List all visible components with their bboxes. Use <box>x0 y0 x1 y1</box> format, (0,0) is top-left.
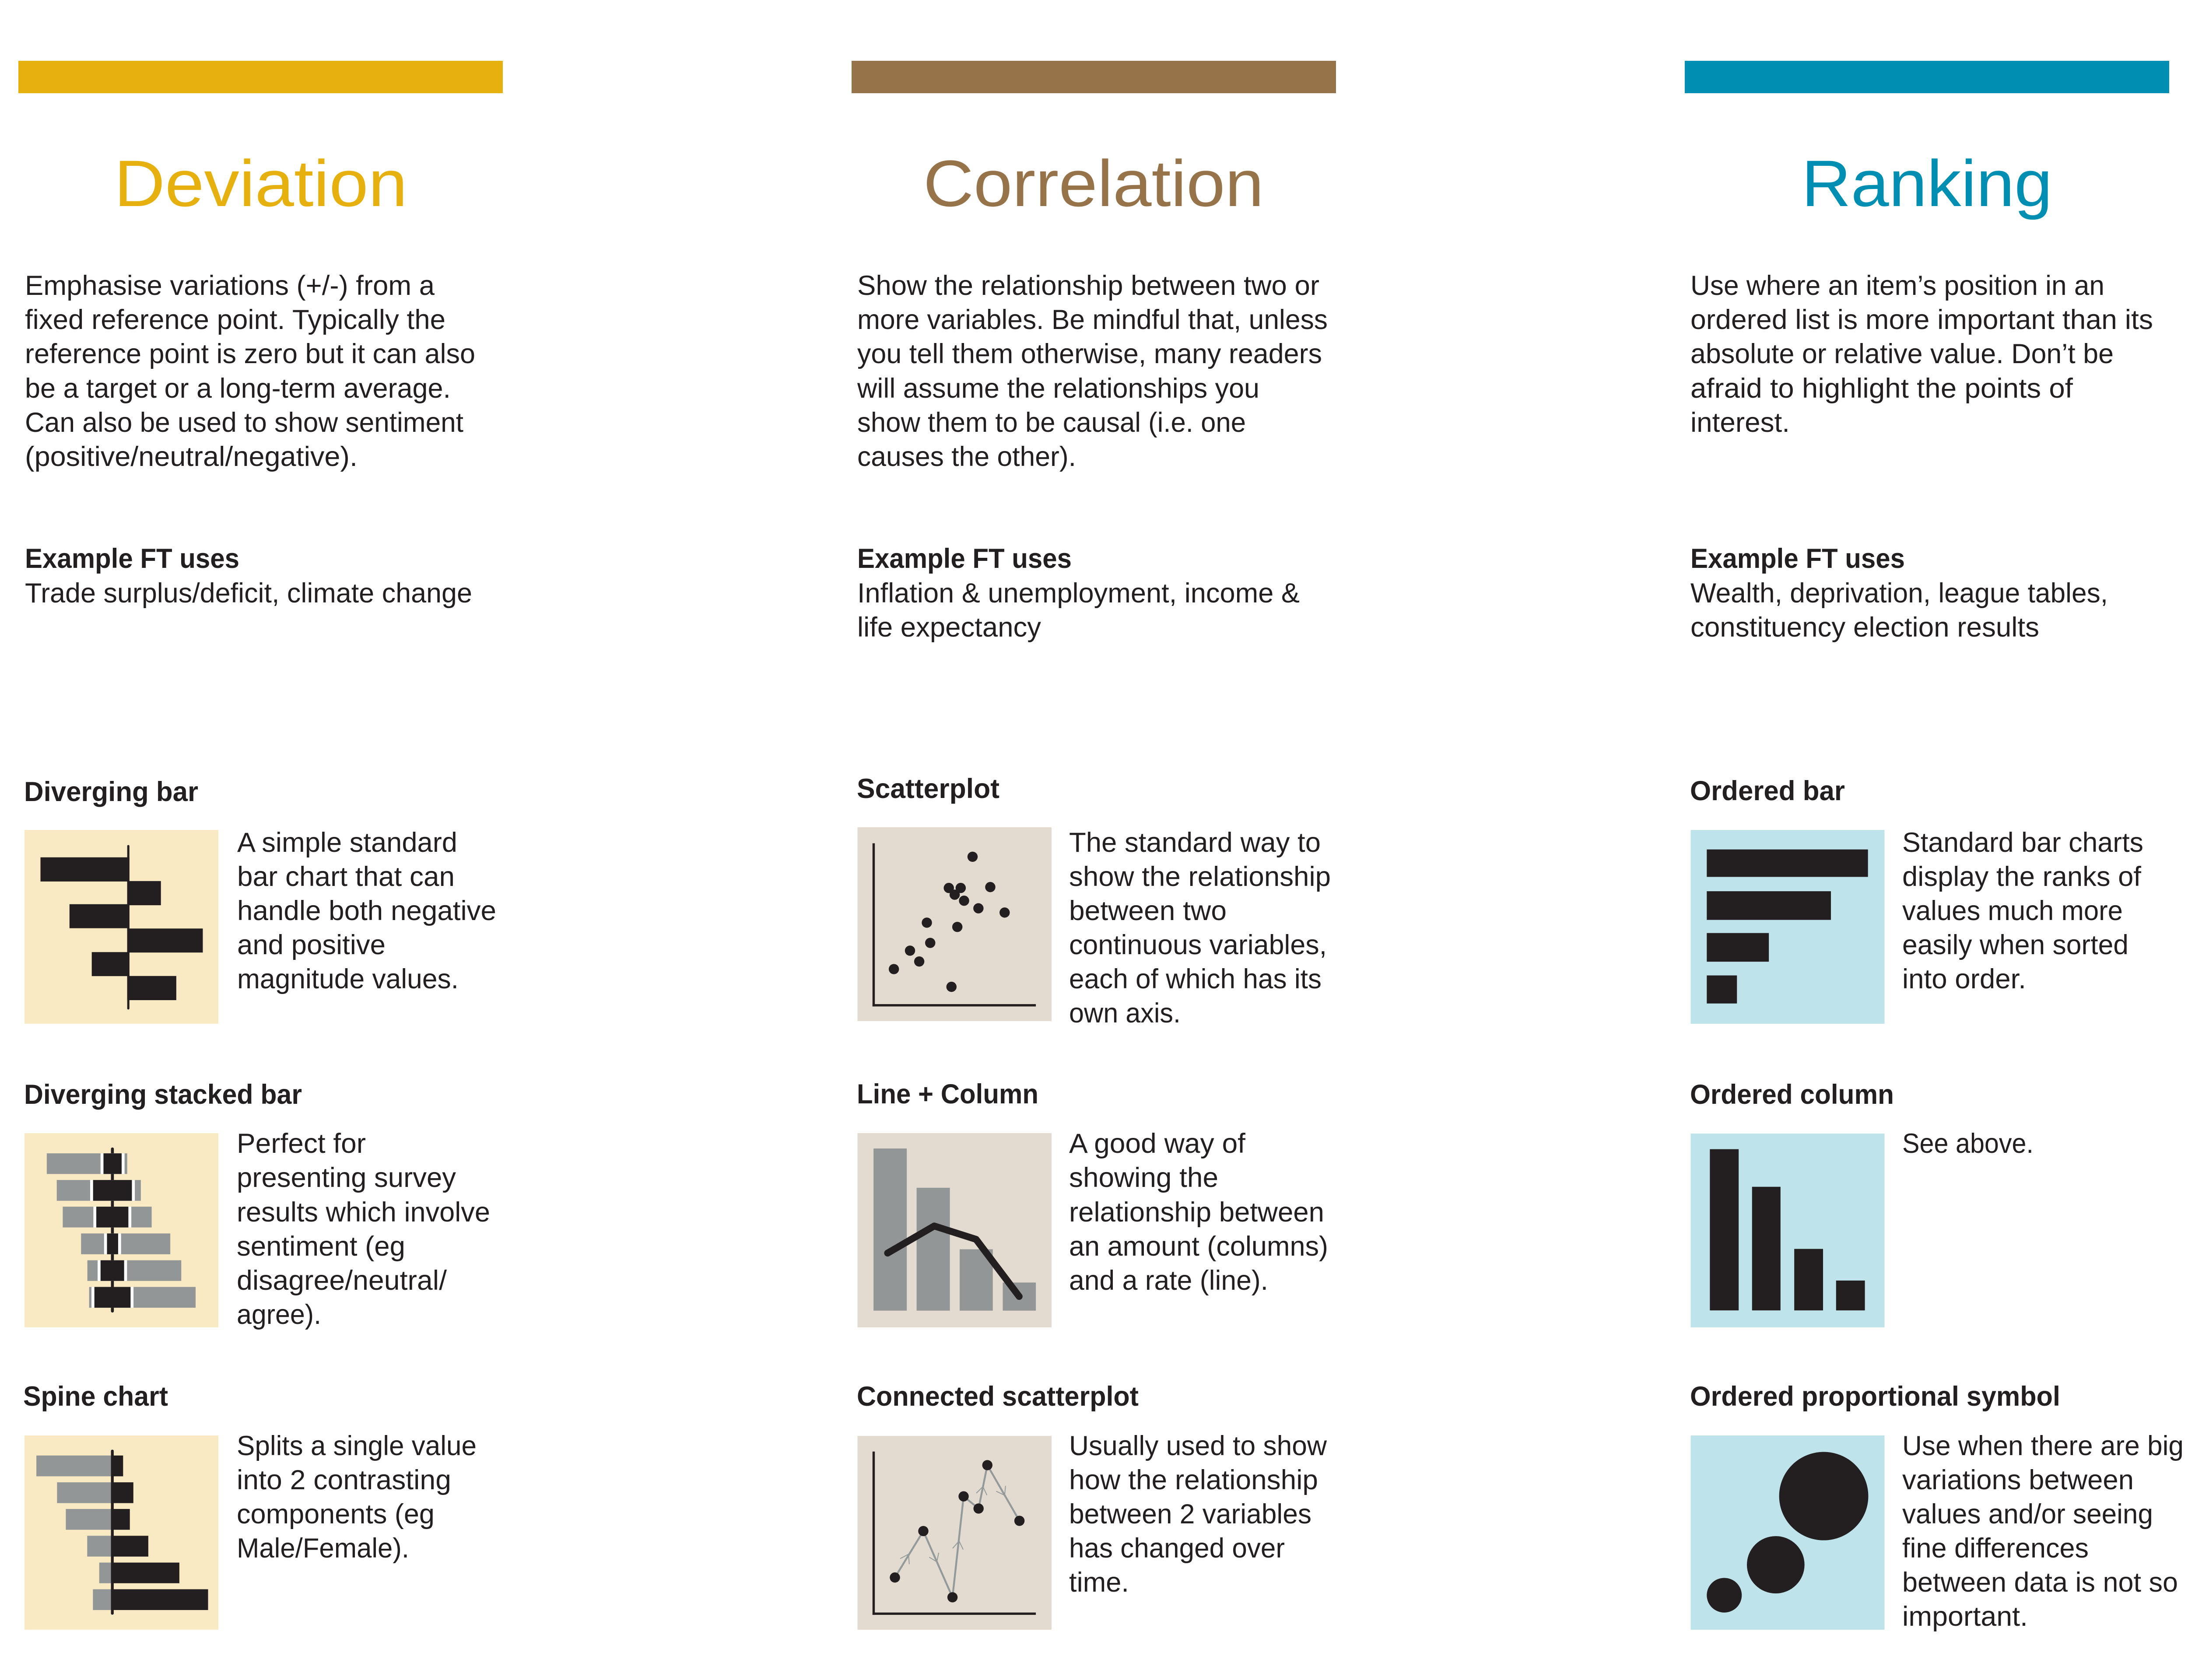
text block: scatterplot description: The standard way to <box>1069 827 1321 858</box>
text block: ordered proportional symbol description: important. <box>1902 1601 2028 1632</box>
text block: diverging stacked bar description: results which involve <box>237 1197 490 1228</box>
text block: correlation description <box>857 270 1328 472</box>
heading: Diverging stacked bar: Diverging stacked bar <box>24 1079 302 1110</box>
text block: correlation description: causes the other). <box>857 441 1076 472</box>
text block: ordered proportional symbol description: fine differences <box>1902 1533 2089 1564</box>
text block: line and column description: and a rate (line). <box>1069 1265 1268 1296</box>
colour bar: ranking <box>1685 61 2169 93</box>
text block: connected scatterplot description: has changed over <box>1069 1533 1285 1564</box>
text block: ranking description <box>1690 270 2153 438</box>
text block: ordered proportional symbol description: between data is not so <box>1902 1567 2178 1598</box>
text block: correlation example uses: life expectancy <box>857 612 1041 643</box>
text block: diverging bar description: handle both negative <box>237 896 496 926</box>
chart icon: diverging bar <box>25 830 218 1024</box>
text block: deviation description: (positive/neutral/negative). <box>25 441 358 472</box>
text block: scatterplot description <box>1069 827 1331 1029</box>
text block: spine chart description: Male/Female). <box>237 1533 409 1564</box>
text block: correlation example uses: Example FT uses <box>857 543 1072 574</box>
heading: Ordered column: Ordered column <box>1690 1079 1894 1110</box>
heading: Scatterplot: Scatterplot <box>857 774 999 804</box>
text block: line and column description: showing the <box>1069 1162 1218 1193</box>
text block: correlation example uses <box>857 543 1300 643</box>
text block: deviation description: be a target or a long-term average. <box>25 373 451 404</box>
text block: correlation description: you tell them otherwise, many readers <box>857 339 1322 369</box>
text block: ordered bar description <box>1902 827 2143 994</box>
text block: diverging bar description: and positive <box>237 930 386 960</box>
text block: ordered proportional symbol description: variations between <box>1902 1465 2134 1495</box>
text block: ranking example uses: Wealth, deprivation, league tables, <box>1690 578 2108 609</box>
text block: scatterplot description: between two <box>1069 896 1227 926</box>
text block: ordered bar description: display the ranks of <box>1902 861 2141 892</box>
chart icon: diverging stacked bar <box>25 1133 218 1327</box>
text block: deviation description <box>25 270 475 472</box>
text block: diverging stacked bar description: presenting survey <box>237 1162 456 1193</box>
title: Ranking: Ranking <box>1802 147 2052 220</box>
text block: ordered bar description: into order. <box>1902 964 2026 994</box>
heading: Ordered bar: Ordered bar <box>1690 776 1845 806</box>
text block: ranking description: afraid to highlight the points of <box>1690 373 2073 404</box>
chart icon: ordered proportional symbol <box>1691 1435 1884 1630</box>
text block: connected scatterplot description: time. <box>1069 1567 1129 1598</box>
text block: line and column description: A good way of <box>1069 1128 1246 1159</box>
text block: deviation description: Emphasise variations (+/-) from a <box>25 270 435 301</box>
text block: ordered column description: See above. <box>1902 1128 2034 1159</box>
text block: deviation example uses: Trade surplus/deficit, climate change <box>25 578 472 609</box>
text block: diverging stacked bar description: agree). <box>237 1299 321 1330</box>
text block: line and column description <box>1069 1128 1328 1296</box>
text block: ordered proportional symbol description <box>1902 1431 2184 1632</box>
text block: connected scatterplot description: Usually used to show <box>1069 1431 1327 1461</box>
colour bar: deviation <box>18 61 503 93</box>
text block: ranking description: interest. <box>1690 407 1790 438</box>
chart icon: scatterplot <box>858 827 1052 1021</box>
heading: Ordered proportional symbol: Ordered proportional symbol <box>1690 1381 2060 1412</box>
text block: connected scatterplot description: between 2 variables <box>1069 1499 1311 1530</box>
colour bar: correlation <box>852 61 1336 93</box>
text block: line and column description: relationship between <box>1069 1197 1324 1228</box>
text block: diverging stacked bar description: Perfect for <box>237 1128 366 1159</box>
text block: deviation description: reference point is zero but it can also <box>25 339 475 369</box>
text block: scatterplot description: show the relationship <box>1069 861 1331 892</box>
text block: deviation example uses: Example FT uses <box>25 543 239 574</box>
text block: ranking description: Use where an item’s position in an <box>1690 270 2104 301</box>
text block: ranking description: absolute or relative value. Don’t be <box>1690 339 2114 369</box>
text block: connected scatterplot description <box>1069 1431 1327 1598</box>
heading: Connected scatterplot: Connected scatterplot <box>857 1381 1139 1412</box>
text block: connected scatterplot description: how the relationship <box>1069 1465 1318 1495</box>
chart icon: spine chart <box>25 1435 218 1630</box>
text block: ordered proportional symbol description: values and/or seeing <box>1902 1499 2153 1530</box>
title: Correlation: Correlation <box>923 147 1264 220</box>
text block: diverging bar description: A simple standard <box>237 827 457 858</box>
chart icon: line and column <box>858 1133 1052 1327</box>
text block: diverging stacked bar description: sentiment (eg <box>237 1231 405 1262</box>
panel: correlation column <box>852 61 1336 1630</box>
text block: correlation description: show them to be causal (i.e. one <box>857 407 1246 438</box>
text block: diverging stacked bar description <box>237 1128 490 1330</box>
text block: ranking example uses: Example FT uses <box>1690 543 1905 574</box>
text block: diverging bar description: magnitude values. <box>237 964 459 994</box>
text block: scatterplot description: continuous variables, <box>1069 930 1327 960</box>
text block: correlation example uses: Inflation & unemployment, income & <box>857 578 1300 609</box>
chart icon: connected scatterplot <box>858 1436 1052 1630</box>
text block: scatterplot description: own axis. <box>1069 998 1181 1029</box>
text block: scatterplot description: each of which has its <box>1069 964 1322 994</box>
heading: Diverging bar: Diverging bar <box>24 777 198 807</box>
heading: Line + Column: Line + Column <box>857 1079 1038 1110</box>
text block: spine chart description: into 2 contrasting <box>237 1465 451 1495</box>
text block: ranking example uses: constituency election results <box>1690 612 2039 643</box>
text block: deviation description: Can also be used to show sentiment <box>25 407 463 438</box>
text block: ranking example uses <box>1690 543 2108 643</box>
text block: ordered bar description: values much more <box>1902 896 2123 926</box>
text block: spine chart description: Splits a single value <box>237 1431 477 1461</box>
text block: correlation description: Show the relationship between two or <box>857 270 1319 301</box>
text block: diverging stacked bar description: disagree/neutral/ <box>237 1265 447 1296</box>
title: Deviation: Deviation <box>114 147 407 220</box>
panel: deviation column <box>18 61 503 1630</box>
text block: deviation example uses <box>25 543 472 609</box>
text block: spine chart description <box>237 1431 477 1564</box>
chart icon: ordered column <box>1691 1134 1884 1327</box>
chart icon: ordered bar <box>1691 830 1884 1024</box>
text block: correlation description: will assume the relationships you <box>857 373 1259 404</box>
panel: ranking column <box>1685 61 2184 1632</box>
text block: diverging bar description: bar chart that can <box>237 861 455 892</box>
text block: spine chart description: components (eg <box>237 1499 435 1530</box>
text block: ranking description: ordered list is more important than its <box>1690 304 2153 335</box>
heading: Spine chart: Spine chart <box>23 1381 168 1412</box>
text block: diverging bar description <box>237 827 496 994</box>
text block: correlation description: more variables. Be mindful that, unless <box>857 304 1328 335</box>
text block: ordered bar description: Standard bar charts <box>1902 827 2143 858</box>
text block: deviation description: fixed reference point. Typically the <box>25 304 445 335</box>
text block: ordered proportional symbol description: Use when there are big <box>1902 1431 2184 1461</box>
text block: line and column description: an amount (columns) <box>1069 1231 1328 1262</box>
text block: ordered bar description: easily when sorted <box>1902 930 2128 960</box>
